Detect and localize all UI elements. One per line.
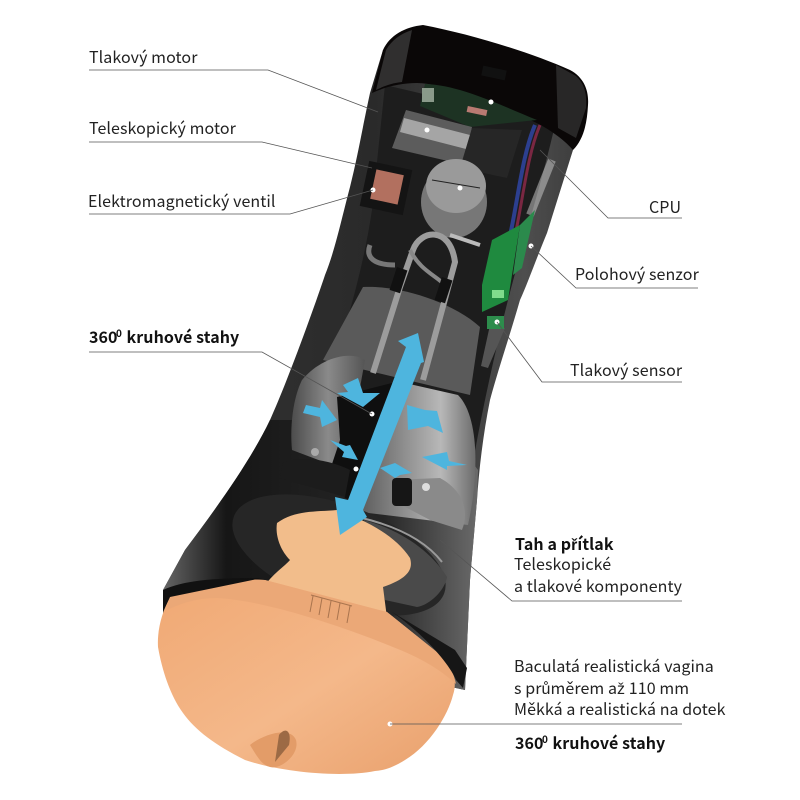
round valve housing	[421, 159, 487, 238]
label: Tlakový motor	[89, 44, 378, 112]
lower shell	[163, 420, 478, 690]
label: 360 kruhové stahy (left): kruhové stahy	[126, 324, 239, 348]
telescopic motor	[392, 110, 472, 165]
cpu wires	[505, 125, 552, 255]
electromagnetic valve	[360, 161, 412, 215]
label: 360 kruhové stahy (right): 0	[542, 731, 548, 746]
blue inward arrows	[303, 378, 467, 478]
cap band	[167, 580, 456, 684]
contraction chamber	[280, 356, 475, 530]
label: Tlakový sensor	[497, 322, 683, 382]
central black window	[330, 383, 405, 505]
cap gloss right	[556, 65, 586, 138]
inner sleeve neck and bulb	[265, 510, 411, 618]
label: Tlakový sensor: Tlakový sensor	[570, 357, 683, 381]
label: Teleskopický motor: Teleskopický motor	[89, 115, 237, 139]
label: Tlakový motor: Tlakový motor	[89, 44, 198, 68]
label: 360 kruhové stahy (left): 0	[116, 325, 122, 340]
dark rim left	[163, 578, 262, 612]
label: Tah a přítlak: Teleskopické	[514, 551, 611, 575]
top cap	[372, 25, 588, 150]
label: Baculatá realistická vagina: Baculatá realistická vagina	[514, 653, 714, 677]
peach end cap	[158, 580, 456, 774]
pressure motor	[460, 128, 522, 178]
blue double arrow	[335, 333, 424, 535]
label: 360 kruhové stahy (left)	[89, 324, 372, 414]
label: Tah a přítlak: a tlakové komponenty	[514, 573, 683, 597]
circuit board	[420, 66, 537, 127]
air tubes	[369, 235, 480, 380]
label: CPU	[540, 150, 682, 218]
inner dark chamber	[300, 85, 555, 480]
device illustration	[158, 25, 588, 774]
cap gloss left	[376, 30, 412, 90]
pressure sensor	[481, 316, 505, 368]
label: Elektromagnetický ventil: Elektromagnetický ventil	[88, 188, 276, 212]
grip ridges	[310, 595, 352, 623]
cap end detail	[250, 732, 297, 767]
label: Elektromagnetický ventil	[88, 188, 373, 214]
label: Tah a přítlak: Tah a přítlak	[515, 531, 614, 555]
label: Polohový senzor: Polohový senzor	[575, 261, 700, 285]
dark rim right	[392, 612, 467, 688]
clamp right	[392, 478, 465, 530]
opening ring	[217, 470, 461, 640]
label: 360 kruhové stahy (right): kruhové stahy	[552, 730, 665, 754]
label: 360 kruhové stahy (left): 360	[89, 324, 118, 348]
label: Polohový senzor	[531, 246, 700, 288]
label: Baculatá realistická vagina: Měkká a realistická na dotek	[514, 696, 726, 720]
label: Baculatá realistická vagina	[390, 653, 726, 724]
inner sleeve	[323, 287, 480, 395]
position sensor board	[482, 210, 535, 312]
label: CPU: CPU	[649, 194, 681, 218]
device body shell	[163, 50, 588, 690]
label: 360 kruhové stahy (right): 360	[515, 730, 544, 754]
label: Teleskopický motor	[89, 115, 372, 168]
label: Tah a přítlak	[440, 531, 683, 601]
label: Baculatá realistická vagina: s průměrem až 110 mm	[514, 675, 689, 699]
clamp left	[280, 459, 350, 497]
